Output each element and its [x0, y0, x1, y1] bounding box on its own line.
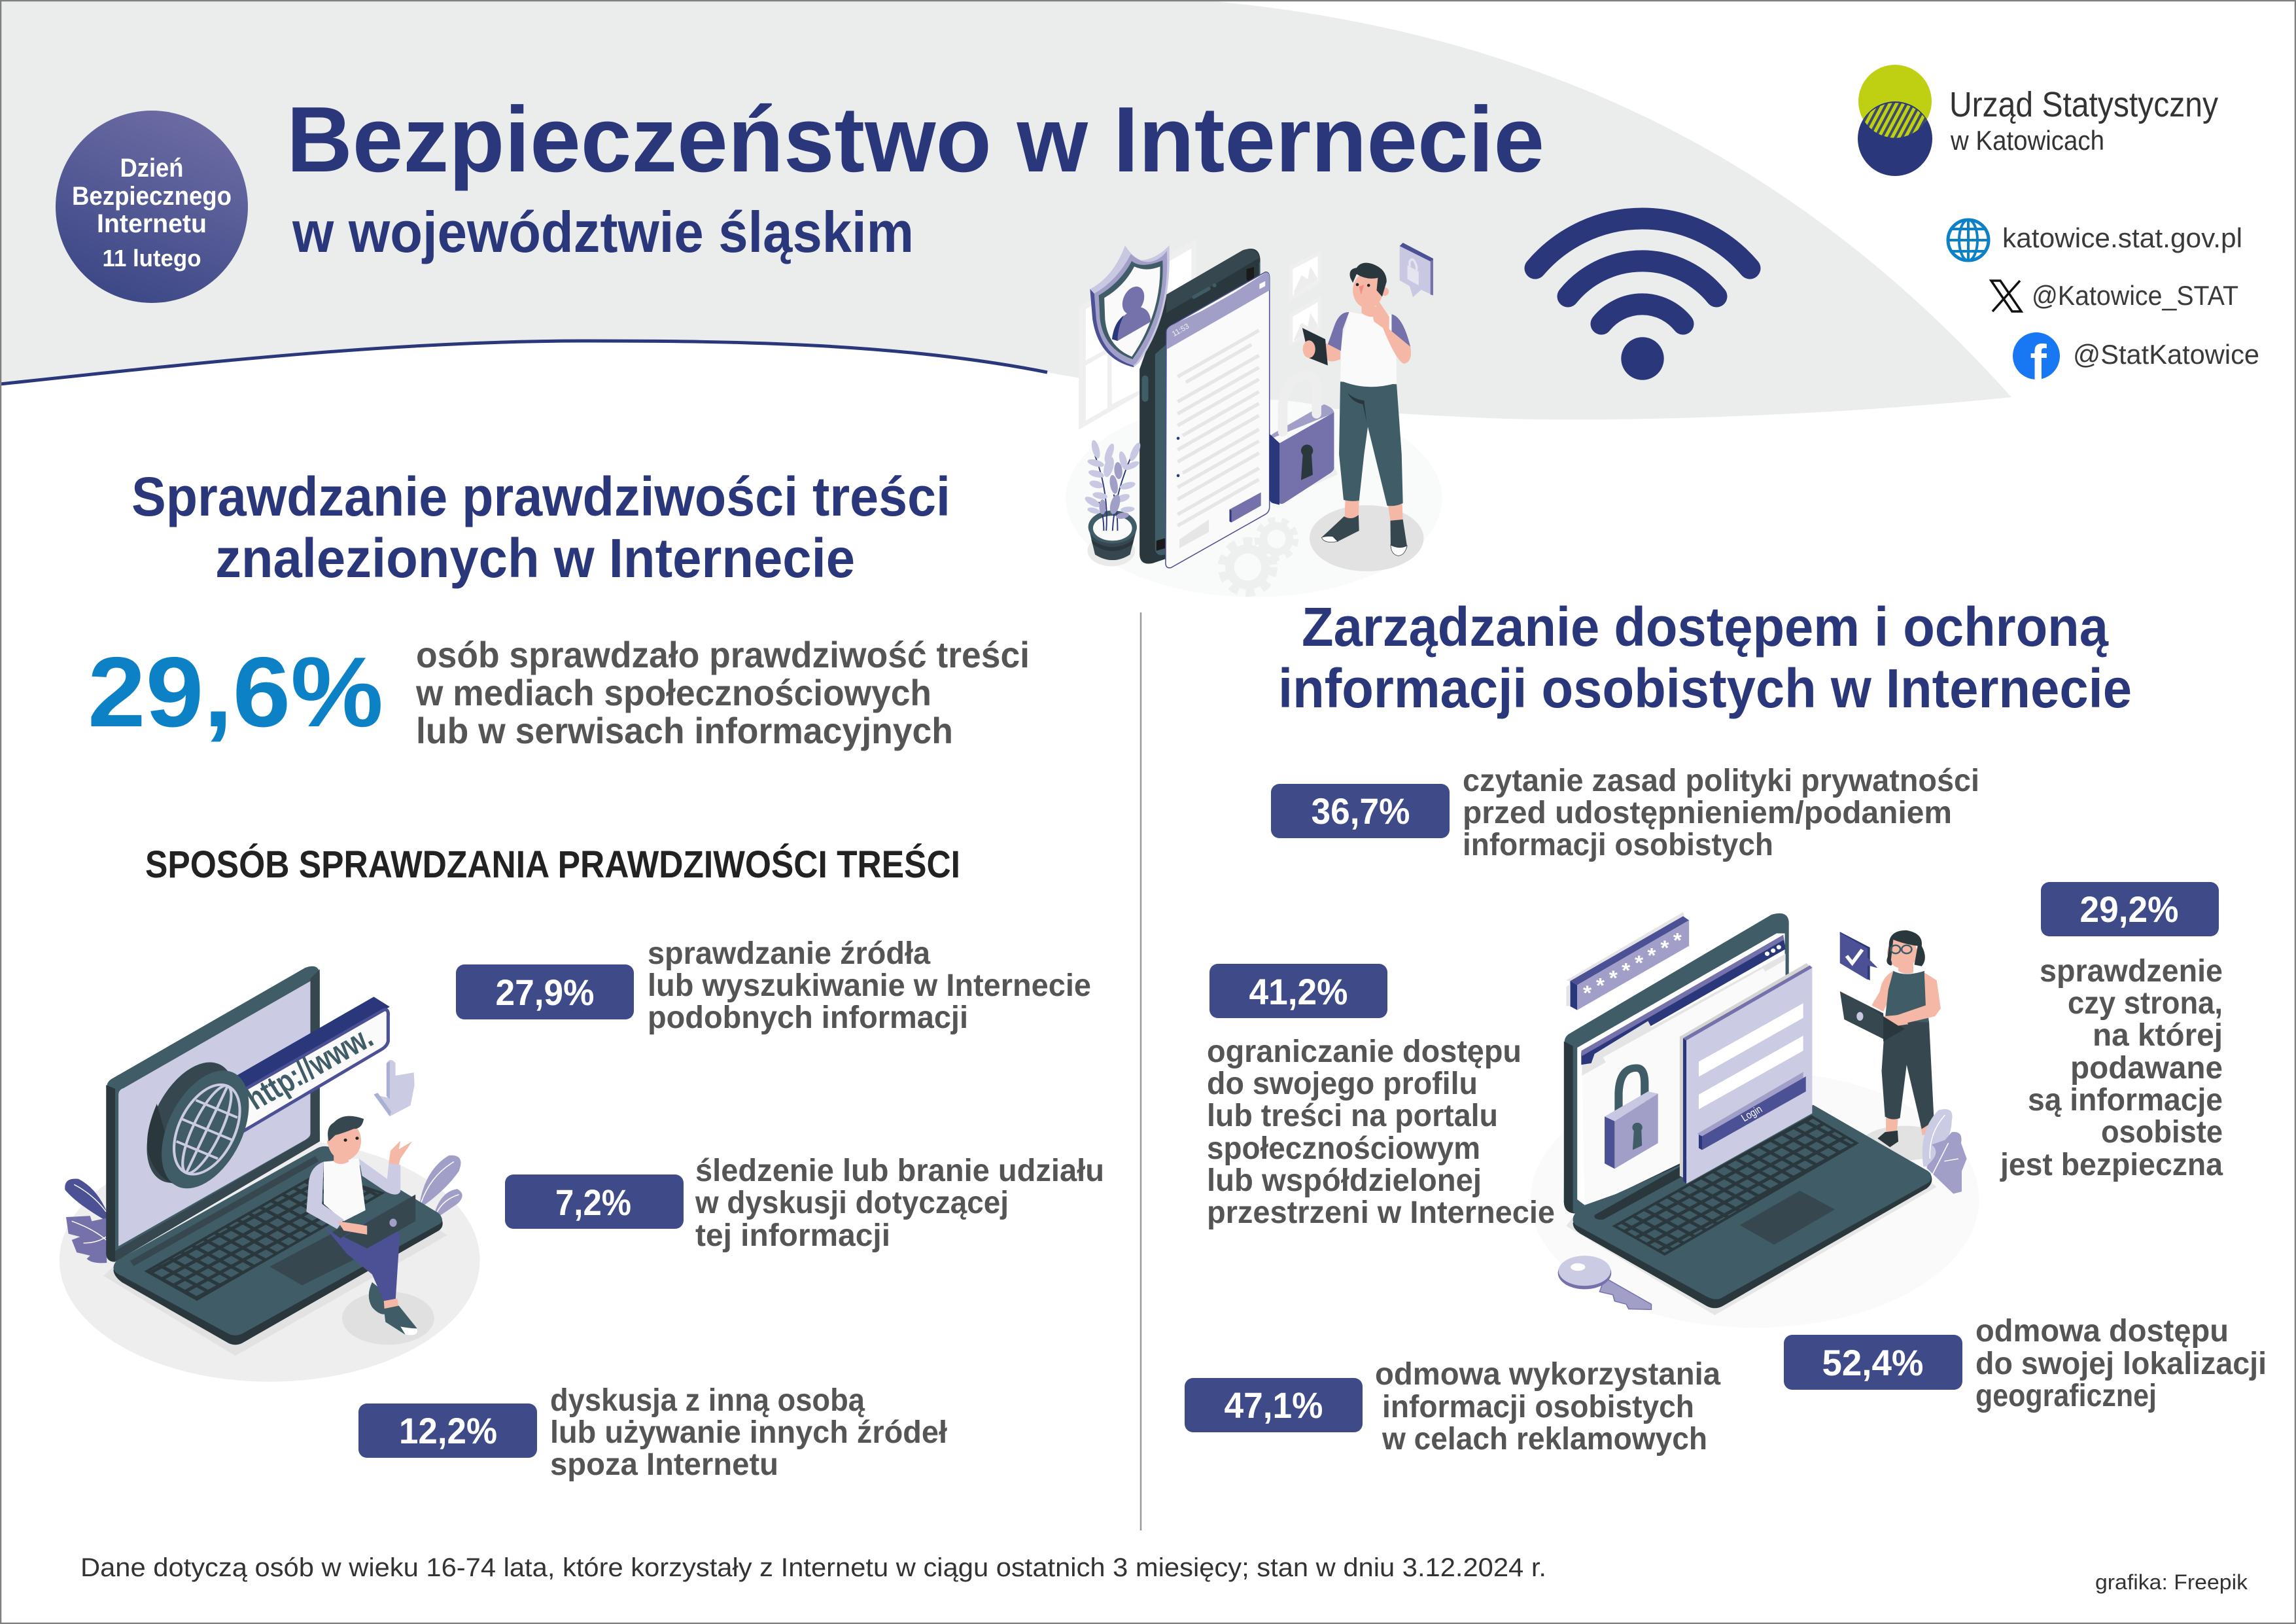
- heading: checking content: znalezionych w Internecie: [215, 527, 855, 589]
- illustration: laptop with login form and woman: [1531, 912, 1979, 1328]
- stat row: 27,9%: podobnych informacji: [648, 1000, 968, 1035]
- logo: Urząd Statystyczny: Urząd Statystyczny: [1949, 85, 2218, 124]
- stat row: 27,9%: 27,9%: [496, 972, 594, 1013]
- heading: access management: [1278, 596, 2132, 719]
- stat: 36,7%: informacji osobistych: [1463, 828, 1773, 862]
- key number description: w mediach społecznościowych: [415, 672, 931, 713]
- phone body: [1139, 249, 1261, 564]
- man: [1302, 263, 1423, 571]
- stat row: 27,9%: sprawdzanie źródła: [648, 936, 930, 971]
- stat: 29,2%: czy strona,: [2068, 986, 2223, 1021]
- stat row: 7,2%: tej informacji: [695, 1218, 890, 1253]
- password field: *: [1647, 944, 1656, 966]
- logo: Urząd Statystyczny: [1858, 65, 2218, 176]
- stat: 52,4%: geograficznej: [1975, 1379, 2157, 1413]
- password field: *: [1660, 936, 1669, 959]
- laptop base: [1573, 1103, 1932, 1308]
- plant: [1083, 439, 1143, 566]
- stat row: 12,2%: dyskusja z inną osobą: [550, 1383, 865, 1418]
- stat: 52,4%: odmowa dostępu: [1975, 1314, 2229, 1349]
- login panel: Login: [1739, 1103, 1764, 1124]
- badge: Dzień Bezpiecznego Internetu: Bezpiecznego: [72, 182, 232, 211]
- stat: 41,2%: [1207, 964, 1555, 1230]
- leaves: [65, 1156, 462, 1263]
- stat row: 12,2%: spoza Internetu: [550, 1447, 778, 1482]
- heading: access management: Zarządzanie dostępem i ochroną: [1302, 596, 2109, 658]
- key number description: lub w serwisach informacyjnych: [416, 710, 953, 751]
- stat row: 7,2%: w dyskusji dotyczącej: [695, 1186, 1009, 1220]
- password field: [1566, 912, 1689, 1010]
- stat: 29,2%: są informacje: [2028, 1083, 2223, 1118]
- contact: Facebook: f: [2030, 335, 2047, 391]
- stat: 41,2%: lub treści na portalu: [1207, 1099, 1498, 1133]
- stat: 47,1%: 47,1%: [1225, 1385, 1323, 1426]
- url bar: http://www.: [239, 1019, 379, 1117]
- stat: 41,2%: do swojego profilu: [1207, 1067, 1478, 1101]
- subheading: SPOSÓB SPRAWDZANIA PRAWDZIWOŚCI TREŚCI: [145, 843, 960, 886]
- badge: Dzień Bezpiecznego Internetu: Internetu: [97, 209, 207, 238]
- contact: Facebook: [2013, 332, 2259, 391]
- heading: access management: informacji osobistych w Internecie: [1278, 658, 2132, 719]
- window: [1079, 239, 1196, 430]
- stat row: 12,2%: 12,2%: [399, 1410, 497, 1451]
- padlock: [1270, 376, 1338, 505]
- stat: 41,2%: ograniczanie dostępu: [1207, 1034, 1522, 1069]
- stat: 47,1%: [1185, 1357, 1720, 1456]
- header grey wave: [0, 0, 2011, 419]
- stat: 41,2%: lub współdzielonej: [1207, 1163, 1482, 1198]
- badge: Dzień Bezpiecznego Internetu: 11 lutego: [102, 245, 201, 272]
- stat: 52,4%: do swojej lokalizacji: [1975, 1347, 2267, 1381]
- stat: 52,4%: [1784, 1314, 2267, 1413]
- stat: 29,2%: 29,2%: [2080, 889, 2178, 930]
- laptop base: [113, 1146, 443, 1345]
- seated man: [306, 1116, 417, 1335]
- laptop lid: [1564, 913, 1789, 1214]
- illustration: big laptop with man and url bar: [60, 966, 480, 1382]
- picture frames: [1289, 251, 1321, 347]
- heading: checking content: Sprawdzanie prawdziwości treści: [131, 466, 950, 527]
- stat: 36,7%: 36,7%: [1311, 790, 1410, 832]
- stat: 47,1%: informacji osobistych: [1382, 1390, 1694, 1424]
- stat: 52,4%: 52,4%: [1822, 1342, 1923, 1383]
- stat: 36,7%: przed udostępnieniem/podaniem: [1463, 796, 1952, 830]
- padlock: [1605, 1068, 1658, 1169]
- stat: 41,2%: społecznościowym: [1207, 1131, 1480, 1166]
- stat: 41,2%: 41,2%: [1249, 971, 1348, 1012]
- title: Bezpieczeństwo w Internecie: [287, 88, 1544, 192]
- stat row: 7,2%: śledzenie lub branie udziału: [695, 1154, 1104, 1188]
- key number description: osób sprawdzało prawdziwość treści: [416, 634, 1030, 675]
- key number 29,6%: 29,6%: [88, 637, 383, 748]
- stat: 47,1%: odmowa wykorzystania: [1375, 1357, 1720, 1392]
- footnote: Dane dotyczą osób w wieku 16-74 lata, które korzystały z Internetu w ciągu ostatnich 3 miesięcy; stan w dniu 3.12.2024 r.: [80, 1553, 1546, 1582]
- stat row: 7,2%: [505, 1154, 1104, 1253]
- stat: 29,2%: [2000, 882, 2223, 1182]
- key number description: [415, 634, 1030, 751]
- woman: [1840, 930, 1941, 1147]
- credit: grafika: Freepik: [2095, 1570, 2248, 1594]
- stat: 36,7%: [1271, 764, 1979, 862]
- stat: 41,2%: przestrzeni w Internecie: [1207, 1195, 1555, 1230]
- login panel: [1680, 963, 1812, 1184]
- plant leaves: [1922, 1109, 1967, 1193]
- stat: 29,2%: na której: [2093, 1018, 2223, 1053]
- stat: 36,7%: czytanie zasad polityki prywatności: [1463, 764, 1979, 798]
- contact: X: @Katowice_STAT: [2032, 280, 2238, 311]
- check bubble: [1840, 932, 1877, 980]
- heading: checking content: [131, 466, 950, 589]
- stat row: 27,9%: [456, 936, 1091, 1035]
- gears: [1222, 520, 1296, 593]
- badge: Dzień Bezpiecznego Internetu: [56, 111, 248, 303]
- stat row: 12,2%: lub używanie innych źródeł: [550, 1415, 947, 1450]
- key: [1558, 1256, 1651, 1309]
- stat: 29,2%: osobiste: [2101, 1115, 2223, 1150]
- contact: website: [1948, 220, 2242, 260]
- subtitle: w województwie śląskim: [292, 200, 914, 264]
- contact: website: katowice.stat.gov.pl: [2002, 222, 2242, 253]
- browser window: [1577, 934, 1786, 1205]
- logo: Urząd Statystyczny: w Katowicach: [1950, 125, 2104, 156]
- stat row: 12,2%: [358, 1383, 947, 1482]
- stat: 29,2%: podawane: [2070, 1051, 2223, 1086]
- globe disc: [129, 1050, 266, 1201]
- icon: wifi: [1535, 219, 1750, 380]
- stat: 29,2%: jest bezpieczna: [2000, 1148, 2223, 1182]
- stat: 47,1%: w celach reklamowych: [1382, 1422, 1707, 1456]
- password field: *: [1635, 951, 1643, 974]
- password field: *: [1673, 928, 1682, 951]
- contact: Facebook: @StatKatowice: [2073, 339, 2259, 370]
- navy wave line: [0, 341, 1047, 384]
- password field: *: [1622, 958, 1631, 981]
- password field: *: [1596, 973, 1605, 997]
- stat row: 27,9%: lub wyszukiwanie w Internecie: [648, 968, 1091, 1003]
- shield with user: [1090, 245, 1170, 367]
- lock speech bubble: [1400, 243, 1433, 297]
- stat: 29,2%: sprawdzenie: [2040, 954, 2223, 989]
- password field: *: [1583, 981, 1592, 1004]
- password field: *: [1609, 966, 1618, 989]
- screen: [106, 966, 320, 1262]
- phone screen: [1166, 272, 1270, 568]
- badge: Dzień Bezpiecznego Internetu: Dzień: [120, 154, 183, 183]
- illustration: man with phone, lock and shield: [1066, 239, 1442, 597]
- stat row: 7,2%: 7,2%: [555, 1182, 631, 1223]
- phone screen: 11:53: [1171, 323, 1191, 338]
- hand cursor: [374, 1060, 415, 1116]
